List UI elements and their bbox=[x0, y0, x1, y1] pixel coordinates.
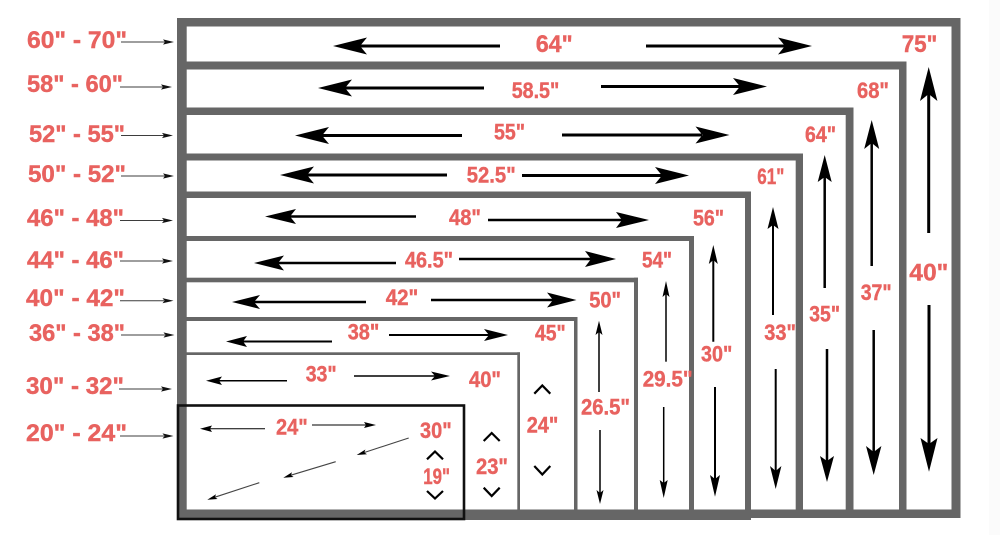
measurement values: 45" bbox=[535, 321, 566, 346]
size range labels: 46" - 48" bbox=[27, 205, 124, 232]
measurement values: 35" bbox=[809, 302, 840, 327]
size range labels: 52" - 55" bbox=[29, 121, 125, 148]
measurement values: 29.5" bbox=[643, 367, 693, 392]
measurement values: 55" bbox=[494, 120, 525, 144]
measurement values: 58.5" bbox=[512, 78, 559, 103]
measurement values: 54" bbox=[642, 248, 672, 273]
measurement values: 24" bbox=[276, 415, 308, 440]
measurement values: 40" bbox=[469, 367, 501, 392]
measurement values: 48" bbox=[449, 205, 481, 230]
measurement values: 50" bbox=[589, 287, 621, 312]
nested frames bbox=[177, 18, 960, 520]
size range labels: 44" - 46" bbox=[27, 247, 124, 274]
measurement values: 75" bbox=[902, 31, 937, 58]
size range labels: 36" - 38" bbox=[29, 320, 125, 347]
size range labels: 50" - 52" bbox=[28, 161, 126, 188]
size range labels: 60" - 70" bbox=[27, 27, 127, 54]
measurement values: 38" bbox=[348, 320, 379, 345]
size range labels: 30" - 32" bbox=[26, 373, 124, 400]
measurement values: 40" bbox=[909, 260, 948, 287]
measurement values: 33" bbox=[764, 320, 796, 345]
measurement values: 68" bbox=[857, 78, 889, 103]
measurement values: 64" bbox=[805, 122, 836, 147]
measurement values: 30" bbox=[420, 418, 452, 443]
black outline: smallest size frame bbox=[178, 406, 464, 519]
measurement values: 30" bbox=[701, 341, 732, 366]
chevron arrows bbox=[427, 386, 550, 498]
size range labels: 20" - 24" bbox=[26, 420, 127, 447]
measurement values: 26.5" bbox=[581, 395, 630, 420]
size range labels bbox=[26, 27, 127, 447]
measurement values: 37" bbox=[861, 280, 892, 305]
measurement values: 52.5" bbox=[467, 163, 516, 188]
measurement values: 56" bbox=[693, 206, 724, 231]
measurement values: 23" bbox=[476, 454, 508, 479]
measurement values bbox=[276, 31, 948, 489]
height arrows bbox=[596, 67, 938, 504]
measurement values: 24" bbox=[527, 413, 558, 438]
measurement values: 42" bbox=[386, 285, 418, 310]
measurement values: 33" bbox=[306, 361, 337, 386]
measurement values: 46.5" bbox=[405, 248, 453, 273]
size range labels: 40" - 42" bbox=[26, 285, 125, 312]
diagonal arrows bbox=[207, 438, 409, 500]
size range labels: 58" - 60" bbox=[27, 71, 123, 98]
measurement values: 19" bbox=[423, 464, 450, 489]
width arrows bbox=[200, 38, 812, 432]
pointer arrows from labels to frames bbox=[119, 39, 174, 439]
measurement values: 61" bbox=[757, 164, 784, 189]
measurement values: 64" bbox=[536, 31, 573, 58]
